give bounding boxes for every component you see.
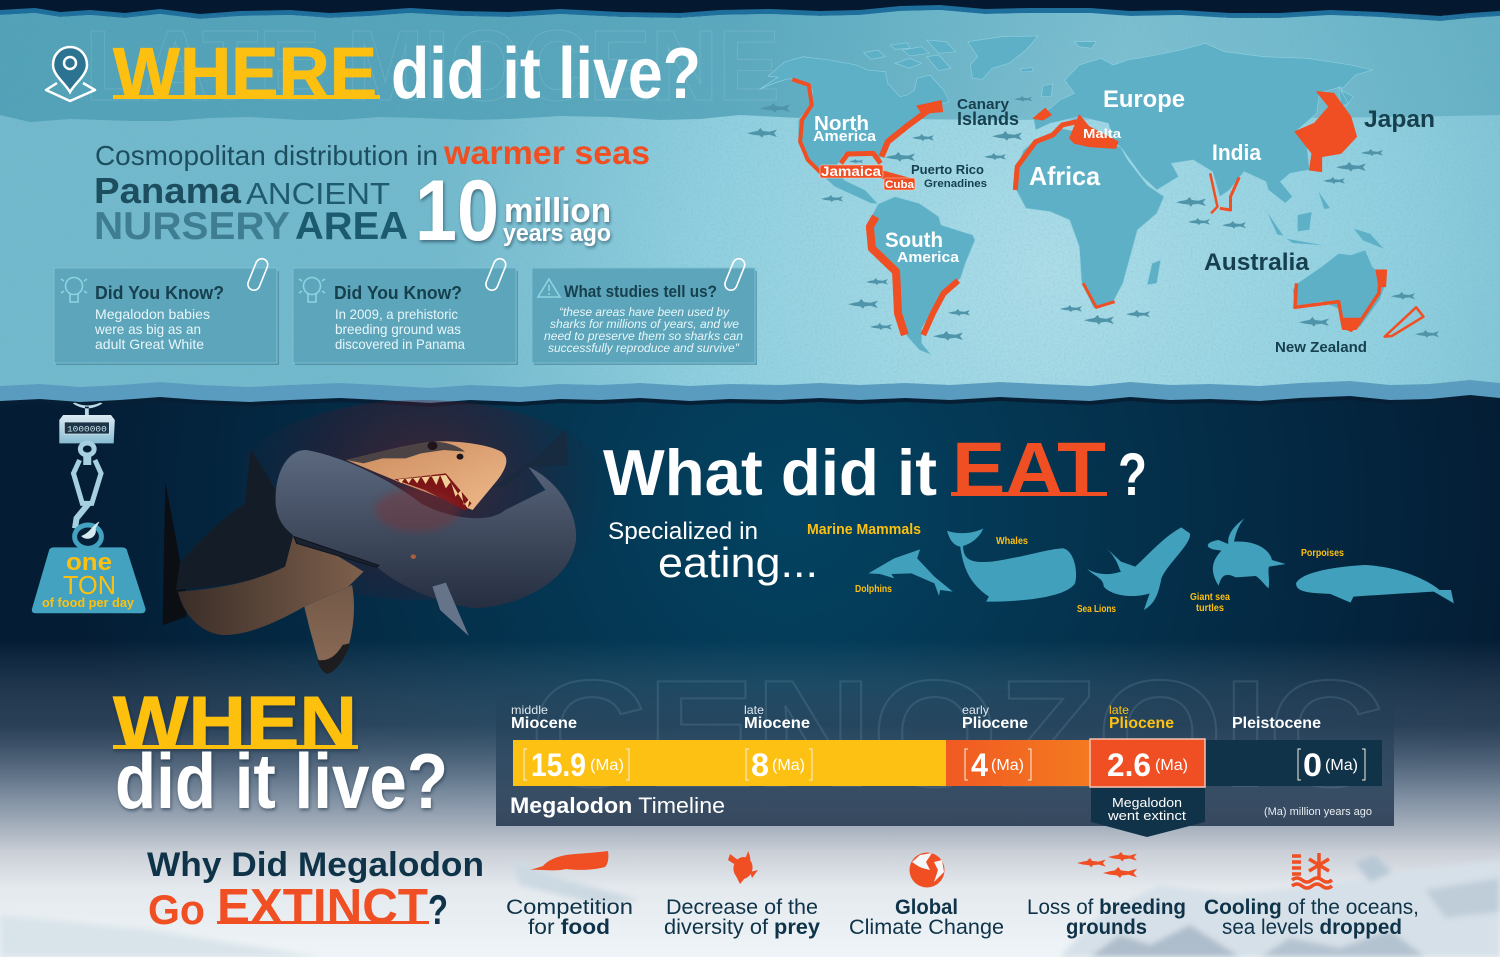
panel: what studies tell us xyxy=(532,257,757,365)
body text: adult Great White xyxy=(95,336,204,352)
map labels xyxy=(813,86,1435,356)
cause labels: Climate Change xyxy=(849,916,1004,939)
callout: megalodon went extinct: went extinct xyxy=(1107,808,1186,823)
heading: megalodon timeline: Megalodon Timeline xyxy=(510,793,725,818)
heading: what studies tell us: What studies tell us? xyxy=(564,282,717,301)
prey labels xyxy=(855,536,1344,615)
icon: map location pin xyxy=(46,47,95,101)
body text: discovered in Panama xyxy=(335,336,465,352)
heading: why did megalodon go extinct xyxy=(147,846,484,934)
panel: paper map background with torn edges xyxy=(0,0,1500,407)
body text: were as big as an xyxy=(94,321,201,337)
quote text: sharks for millions of years, and we xyxy=(550,317,739,331)
map labels: Malta xyxy=(1083,126,1122,141)
map labels: Africa xyxy=(1029,161,1101,191)
shark mouth and teeth xyxy=(394,473,471,511)
watermark: CENOZOIC: CENOZOIC xyxy=(530,649,1385,819)
map labels: Cuba xyxy=(885,179,915,191)
icon: dolphin xyxy=(868,549,953,596)
title: WHERE did it live? xyxy=(113,34,701,114)
text block: Panama ancient nursery area xyxy=(94,170,408,248)
timeline values: 2.6 xyxy=(1107,747,1151,783)
whale flipper xyxy=(432,583,469,636)
timeline values: (Ma) xyxy=(1155,757,1188,774)
map labels: South xyxy=(885,229,943,252)
whale tail fluke xyxy=(494,428,568,487)
cause labels: Decrease of the xyxy=(666,896,818,919)
heading: why did megalodon go extinct: Go xyxy=(148,886,205,933)
extinction causes xyxy=(506,851,1419,939)
text block: cosmopolitan distribution: Cosmopolitan distribution in xyxy=(95,140,438,171)
prey labels: Whales xyxy=(996,536,1028,547)
timeline values: (Ma) xyxy=(590,757,624,774)
whale eye xyxy=(411,554,416,559)
map labels: Jamaica xyxy=(821,163,881,179)
title: What did it EAT?: ? xyxy=(1118,441,1147,508)
cause labels: Loss of breeding xyxy=(1027,896,1186,919)
text block: 10 million years ago xyxy=(415,163,611,259)
scale head xyxy=(59,403,115,443)
text block: 10 million years ago: years ago xyxy=(503,220,611,247)
icon: hanging scale with weight xyxy=(32,403,146,613)
map labels: America xyxy=(897,249,960,266)
body text: breeding ground was xyxy=(335,321,461,337)
darker upper band xyxy=(0,0,1500,122)
background: ice field xyxy=(0,850,1500,957)
epoch labels: Pliocene xyxy=(1109,715,1174,732)
cause labels xyxy=(506,896,1419,939)
body text xyxy=(94,306,210,352)
map labels: North xyxy=(814,113,869,135)
map labels: America xyxy=(813,128,877,145)
epoch labels: Pleistocene xyxy=(1232,715,1321,732)
shark upper body xyxy=(176,449,297,590)
weight xyxy=(32,522,146,613)
bracket ticks xyxy=(524,749,1365,780)
timeline values: (Ma) xyxy=(991,757,1024,774)
shark belly xyxy=(178,530,364,635)
prey labels: turtles xyxy=(1196,603,1224,614)
cause labels: grounds xyxy=(1066,916,1147,939)
epoch labels: late xyxy=(1109,703,1129,717)
top dark strip xyxy=(0,0,1500,60)
world map xyxy=(747,36,1439,356)
scale head: 1000000 xyxy=(67,425,107,434)
icon: paperclip xyxy=(484,257,508,292)
cause labels: Competition xyxy=(506,896,633,919)
timeline values: 8 xyxy=(751,747,769,783)
cause labels: Global xyxy=(895,896,958,919)
prey labels: Sea Lions xyxy=(1077,604,1116,615)
hook chain xyxy=(73,443,101,528)
quote text: successfully reproduce and survive" xyxy=(548,341,740,355)
map labels: Australia xyxy=(1204,249,1310,276)
cause labels: Cooling of the oceans, xyxy=(1204,896,1419,919)
icon: sea turtle xyxy=(1208,518,1286,588)
timeline values xyxy=(531,747,1358,783)
icon: sea lion xyxy=(1087,527,1190,610)
prey labels: Porpoises xyxy=(1301,548,1344,559)
cause labels: sea levels dropped xyxy=(1222,916,1402,939)
prey silhouettes xyxy=(868,518,1454,610)
title: WHEN did it live? xyxy=(113,681,448,825)
timeline values: 4 xyxy=(971,747,988,783)
red distribution regions xyxy=(792,79,1423,337)
text block: Panama ancient nursery area: NURSERY xyxy=(94,205,290,248)
body text xyxy=(335,306,465,352)
text block: cosmopolitan distribution xyxy=(95,134,650,171)
weight label: one ton of food per day: TON xyxy=(63,570,116,600)
text: specialized in eating: Specialized in xyxy=(608,518,758,545)
icon: paperclip xyxy=(246,257,270,292)
text block: Panama ancient nursery area: Panama xyxy=(94,170,242,211)
epoch labels: Pliocene xyxy=(962,715,1028,732)
prey labels: Giant sea xyxy=(1190,592,1230,603)
epoch labels: late xyxy=(744,703,764,717)
heading: did you know: Did You Know? xyxy=(95,283,224,303)
heading: why did megalodon go extinct: Why Did Megalodon xyxy=(147,846,484,884)
timeline values: (Ma) xyxy=(772,757,805,774)
watermark: LATE MIOCENE: LATE MIOCENE xyxy=(85,10,780,122)
map labels: Grenadines xyxy=(924,178,987,190)
title: WHEN did it live?: did it live? xyxy=(115,737,448,825)
weight label: one ton of food per day: of food per day xyxy=(42,596,134,610)
title: What did it EAT?: EAT xyxy=(952,427,1106,510)
sperm whale body xyxy=(276,450,576,608)
icon: globe xyxy=(910,852,944,888)
weight label: one ton of food per day xyxy=(42,549,134,610)
panel: did you know 1 xyxy=(54,257,279,365)
icon: turtle xyxy=(728,851,758,884)
icon: light bulb xyxy=(61,278,87,302)
sharks scattered in the oceans xyxy=(747,96,1439,341)
shark tail xyxy=(163,482,186,625)
bar: miocene xyxy=(513,740,946,786)
continents xyxy=(759,36,1387,355)
bar: early pliocene xyxy=(946,740,1091,786)
label plates: Jamaica and Cuba xyxy=(820,165,915,190)
icon: whale xyxy=(947,528,1076,602)
weight label: one ton of food per day: one xyxy=(66,549,112,576)
timeline values: 0 xyxy=(1303,747,1322,783)
heading: marine mammals: Marine Mammals xyxy=(807,521,921,538)
body text: Megalodon babies xyxy=(95,306,210,322)
text block: Panama ancient nursery area: ANCIENT xyxy=(246,176,390,211)
title: What did it EAT? xyxy=(603,427,1147,510)
icon: paperclip xyxy=(723,257,747,292)
quote text xyxy=(544,305,743,355)
map labels: Puerto Rico xyxy=(911,162,984,177)
map labels: New Zealand xyxy=(1275,340,1367,356)
title: WHERE did it live?: WHERE xyxy=(113,34,377,114)
text: specialized in eating xyxy=(608,518,818,586)
map labels: Islands xyxy=(957,109,1019,129)
text block: cosmopolitan distribution: warmer seas xyxy=(443,134,650,171)
panel: did you know 2 xyxy=(293,257,518,365)
whale jaw xyxy=(294,537,379,567)
map labels: Japan xyxy=(1364,106,1435,133)
body text: In 2009, a prehistoric xyxy=(335,306,458,322)
cause labels: diversity of prey xyxy=(664,916,820,939)
text: specialized in eating: eating... xyxy=(658,539,818,586)
background: fade from ocean to ice xyxy=(0,640,1500,852)
timeline values: (Ma) xyxy=(1325,757,1358,774)
text block: 10 million years ago: million xyxy=(504,192,611,230)
prey labels: Dolphins xyxy=(855,584,892,595)
callout: megalodon went extinct xyxy=(1091,788,1205,837)
panel: timeline xyxy=(496,649,1394,837)
text block: 10 million years ago: 10 xyxy=(415,163,499,259)
epoch labels xyxy=(511,703,1321,732)
whale wound xyxy=(375,488,459,532)
icon: whale competition xyxy=(530,851,608,870)
epoch labels: Miocene xyxy=(511,715,577,732)
icon: cooling waves and snowflake xyxy=(1292,853,1332,888)
bar: pleistocene xyxy=(1205,740,1382,786)
epoch labels: early xyxy=(962,703,989,717)
note: million years ago: (Ma) million years ago xyxy=(1264,806,1372,818)
icon: porpoise xyxy=(1296,565,1454,603)
bar: late pliocene highlighted xyxy=(1090,739,1205,787)
cause labels: for food xyxy=(528,916,610,939)
epoch labels: Miocene xyxy=(744,715,810,732)
shark pectoral fin xyxy=(304,585,354,673)
timeline values: 15.9 xyxy=(531,747,586,783)
icon: light bulb xyxy=(299,278,325,302)
icon: fish group xyxy=(1077,852,1137,878)
heading: did you know: Did You Know? xyxy=(334,283,462,303)
title: What did it EAT?: What did it xyxy=(603,436,937,509)
title: WHERE did it live?: did it live? xyxy=(391,34,701,114)
icon: warning triangle xyxy=(538,279,560,297)
quote text: need to preserve them so sharks can xyxy=(544,329,743,343)
map labels: Canary xyxy=(957,96,1010,113)
quote text: “these areas have been used by xyxy=(559,305,730,319)
title: WHEN did it live?: WHEN xyxy=(113,681,357,764)
heading: why did megalodon go extinct: EXTINCT xyxy=(217,880,428,934)
illustration: megalodon biting sperm whale xyxy=(163,400,620,674)
map labels: Europe xyxy=(1103,86,1185,113)
heading: why did megalodon go extinct: ? xyxy=(428,886,448,933)
epoch labels: middle xyxy=(511,703,548,717)
shark head xyxy=(346,441,506,510)
map labels: India xyxy=(1212,140,1262,165)
text block: Panama ancient nursery area: AREA xyxy=(295,205,408,248)
callout: megalodon went extinct: Megalodon xyxy=(1112,795,1182,810)
